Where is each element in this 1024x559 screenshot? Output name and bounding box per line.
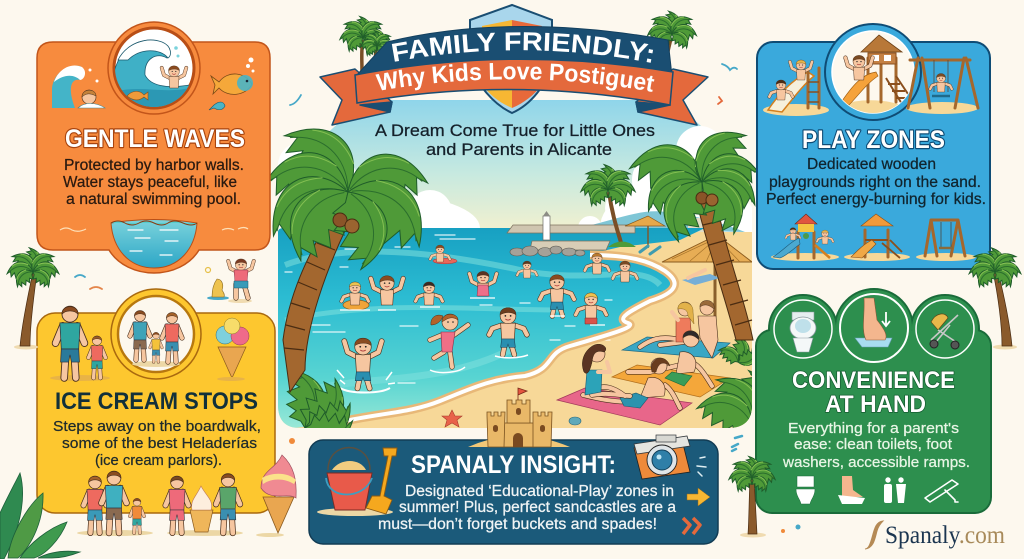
right foreground palm <box>626 117 764 340</box>
body text: playgrounds right on the sand. <box>769 174 981 191</box>
body text: Steps away on the boardwalk, <box>53 418 261 435</box>
body text: Designated ‘Educational-Play’ zones in <box>405 483 674 500</box>
top circle playground icon <box>825 24 921 120</box>
subtitle <box>375 122 655 159</box>
sand <box>278 232 752 428</box>
heading: PLAY ZONES <box>802 126 945 154</box>
scene bushes <box>286 340 752 428</box>
small palm by green panel <box>729 456 775 538</box>
three small playground icons <box>771 214 976 261</box>
panel background <box>757 42 990 269</box>
big thatched umbrella <box>662 240 752 318</box>
heading <box>792 367 955 418</box>
couple with ice cream <box>166 474 243 536</box>
body text: summer! Plus, perfect sandcastles are a <box>399 499 676 516</box>
body text: Everything for a parent's <box>788 420 959 437</box>
water bowl <box>60 220 248 268</box>
heading: CONVENIENCE <box>792 367 955 394</box>
panel: gentle waves <box>37 22 270 273</box>
sandcastle <box>468 388 570 447</box>
heading: ICE CREAM STOPS <box>55 388 258 415</box>
panel: spanaly insight <box>309 388 718 544</box>
camera sparks, arrow and chevrons <box>683 457 710 534</box>
distant hill and town <box>592 211 745 232</box>
panel background <box>37 313 275 513</box>
starfish and shell <box>442 410 581 427</box>
central beach scene <box>270 100 756 428</box>
swimmers front <box>337 308 528 392</box>
camera icon <box>634 435 690 479</box>
body text: Water stays peaceful, like <box>63 174 237 191</box>
people on right towels <box>557 300 730 425</box>
fish icons <box>209 58 254 110</box>
heading: AT HAND <box>825 391 926 418</box>
left palm tree <box>7 247 59 350</box>
left foreground palm <box>256 109 442 392</box>
panel: play zones <box>757 24 990 269</box>
small umbrella and loungers <box>625 216 665 254</box>
shield <box>470 5 552 113</box>
foot washer icon circle <box>840 294 908 362</box>
walking father and child <box>50 306 110 381</box>
swimmers far <box>430 245 637 282</box>
small birds <box>75 64 737 289</box>
body text: washers, accessible ramps. <box>782 454 970 471</box>
banner top palms <box>340 10 696 72</box>
body text <box>378 483 676 533</box>
body text: must—don’t forget buckets and spades! <box>378 516 657 533</box>
body text <box>782 420 970 471</box>
panel: convenience at hand <box>756 289 991 513</box>
body text: ease: clean toilets, foot <box>794 436 953 453</box>
body text: a natural swimming pool. <box>66 191 241 208</box>
orange ribbon <box>355 59 673 105</box>
panel background <box>37 42 270 273</box>
heading: SPANALY INSIGHT: <box>411 451 616 479</box>
breakwater and lighthouse <box>507 211 635 256</box>
body text: Protected by harbor walls. <box>64 157 244 174</box>
swimmers middle row <box>340 271 606 325</box>
body text: (ice cream parlors). <box>95 452 222 469</box>
shoreline foam <box>340 255 675 422</box>
body text: Dedicated wooden <box>807 156 936 173</box>
body text <box>766 156 986 208</box>
clouds <box>278 126 752 232</box>
ice cream cone <box>216 318 249 381</box>
body text <box>53 418 261 469</box>
panel: ice cream stops <box>37 289 296 537</box>
decorative dots <box>289 436 800 533</box>
heading: GENTLE WAVES <box>65 125 245 153</box>
small wave and swimmer icon <box>52 65 105 108</box>
panel background <box>756 289 991 513</box>
body text <box>63 157 244 208</box>
sea light bands <box>285 252 660 390</box>
stroller icon circle <box>916 300 974 358</box>
banner tails <box>320 69 708 125</box>
sky <box>280 100 701 228</box>
navy ribbon <box>356 26 672 76</box>
bottom amenity icons <box>796 476 958 504</box>
title text <box>375 32 654 92</box>
sea <box>278 228 705 428</box>
large ice cream cone <box>256 455 296 537</box>
body text: Perfect energy-burning for kids. <box>766 191 986 208</box>
body text: some of the best Heladerías <box>62 435 257 452</box>
child and duck on left <box>206 259 254 303</box>
small background palm <box>581 164 636 247</box>
panel background <box>309 440 718 544</box>
toilet icon circle <box>774 300 832 358</box>
top circle wave icon <box>108 22 200 114</box>
bottom family walking <box>77 471 153 536</box>
title banner <box>319 4 709 126</box>
top circle family icon <box>111 289 201 379</box>
subtitle: and Parents in Alicante <box>426 141 612 159</box>
slide with kids <box>763 60 829 116</box>
bottom left leaves <box>0 473 80 559</box>
right palm tree <box>969 247 1021 350</box>
title text: Why Kids Love Postiguet <box>375 63 654 92</box>
subtitle: A Dream Come True for Little Ones <box>375 122 655 140</box>
swing icon <box>906 58 978 114</box>
bucket and spade <box>317 448 397 516</box>
spanaly logo: Spanaly.com <box>885 522 1006 549</box>
title text: FAMILY FRIENDLY: <box>392 32 654 63</box>
